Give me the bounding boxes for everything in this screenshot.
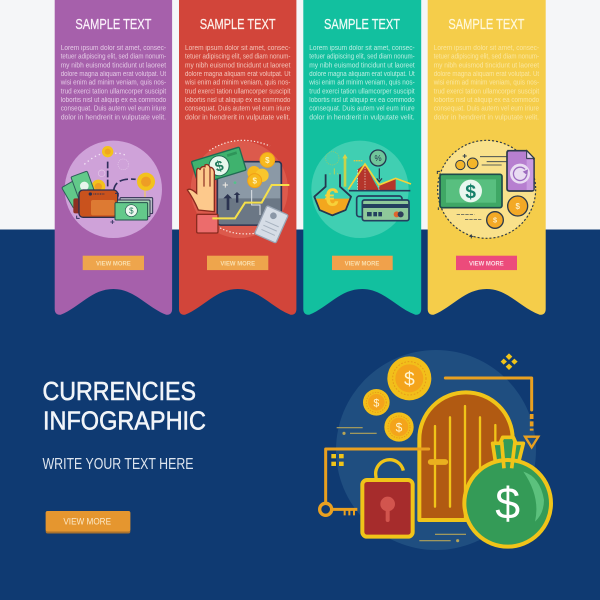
icon: euro pot, chart and cards [311, 141, 411, 238]
heading: SAMPLE TEXT [324, 16, 400, 33]
banner shape [303, 0, 421, 315]
sparkle diamonds [501, 353, 518, 370]
body text: dolore magna aliquam erat volutpat. Ut [61, 71, 166, 78]
banner shape [428, 0, 546, 315]
button: view more: VIEW MORE [469, 260, 504, 267]
body text: my nibh euismod tincidunt ut laoreet [61, 62, 166, 69]
panel: yellow banner [428, 0, 546, 315]
body text: tetuer adipiscing elit, sed diam nonum- [434, 54, 540, 61]
button: view more [332, 256, 393, 270]
body text: dolore magna aliquam erat volutpat. Ut [309, 71, 415, 78]
body text: lobortis nisl ut aliquip ex ea commodo [309, 97, 415, 104]
title: CURRENCIES [42, 378, 196, 406]
body text: lobortis nisl ut aliquip ex ea commodo [185, 97, 290, 104]
button: view more [456, 256, 517, 270]
icon: euro pot, chart and cards: % [374, 154, 382, 163]
body text: wisi enim ad minim veniam, quis nos- [184, 80, 291, 87]
body text [433, 45, 540, 121]
body text: Lorem ipsum dolor sit amet, consec- [309, 45, 415, 52]
heading: SAMPLE TEXT [448, 16, 524, 33]
button: view more: VIEW MORE [345, 260, 380, 267]
body text: dolor in hendrerit in vulputate velit. [185, 114, 290, 121]
backdrop circle [336, 350, 536, 550]
body text: trud exerci tation ullamcorper suscipit [61, 88, 166, 95]
body text: dolor in hendrerit in vulputate velit. [434, 114, 539, 121]
icon: hand, bill, screen and trend line: $ [213, 158, 226, 176]
background: navy lower band [0, 230, 600, 600]
panel: green banner [303, 0, 421, 315]
body text: wisi enim ad minim veniam, quis nos- [308, 80, 415, 87]
icon: wallet and cash: $ [129, 207, 134, 216]
banner shape [55, 0, 172, 315]
body text: Lorem ipsum dolor sit amet, consec- [61, 45, 167, 52]
icon: hand, bill, screen and trend line [187, 140, 289, 243]
body text: wisi enim ad minim veniam, quis nos- [433, 80, 540, 87]
body text [60, 45, 167, 121]
coins: $ [373, 397, 379, 409]
body text: Lorem ipsum dolor sit amet, consec- [434, 45, 540, 52]
body text: lobortis nisl ut aliquip ex ea commodo [61, 97, 166, 104]
coins: $ [404, 369, 415, 390]
subtitle: WRITE YOUR TEXT HERE [42, 456, 194, 473]
icon: banknote, document and coins [437, 140, 536, 238]
accent lines [337, 428, 466, 542]
button: view more [83, 256, 144, 270]
illustration: vault door, lock, key, coins and money bag [320, 350, 551, 550]
body text: Lorem ipsum dolor sit amet, consec- [185, 45, 291, 52]
icon: banknote, document and coins: $ [493, 216, 497, 225]
body text: consequat. Duis autem vel eum iriure [309, 106, 415, 113]
money bag [464, 437, 551, 547]
heading: SAMPLE TEXT [75, 16, 151, 33]
coins: $ [396, 420, 403, 434]
body text: my nibh euismod tincidunt ut laoreet [309, 62, 415, 69]
body text: tetuer adipiscing elit, sed diam nonum- [309, 54, 415, 61]
body text: dolor in hendrerit in vulputate velit. [309, 114, 415, 121]
body text: lobortis nisl ut aliquip ex ea commodo [434, 97, 539, 104]
icon: wallet and cash [62, 141, 162, 238]
body text: trud exerci tation ullamcorper suscipit [185, 88, 290, 95]
body text: trud exerci tation ullamcorper suscipit [434, 88, 539, 95]
body text: dolore magna aliquam erat volutpat. Ut [434, 71, 539, 78]
icon: banknote, document and coins: $ [515, 202, 520, 211]
body text: dolor in hendrerit in vulputate velit. [61, 114, 166, 121]
title: INFOGRAPHIC [43, 408, 206, 436]
body text: tetuer adipiscing elit, sed diam nonum- [61, 54, 167, 61]
body text: consequat. Duis autem vel eum iriure [185, 106, 290, 113]
door [419, 392, 513, 520]
body text: my nibh euismod tincidunt ut laoreet [185, 62, 290, 69]
icon: hand, bill, screen and trend line: $ [265, 156, 270, 165]
icon: hand, bill, screen and trend line: $ [252, 177, 257, 186]
body text: consequat. Duis autem vel eum iriure [434, 106, 539, 113]
body text [184, 45, 291, 121]
icon: banknote, document and coins: $ [465, 182, 476, 203]
body text: consequat. Duis autem vel eum iriure [61, 106, 166, 113]
body text: trud exerci tation ullamcorper suscipit [309, 88, 415, 95]
padlock [362, 460, 413, 537]
body text: my nibh euismod tincidunt ut laoreet [434, 62, 539, 69]
panel: purple banner [55, 0, 172, 315]
dashed arrow [445, 378, 538, 447]
button: view more [46, 511, 130, 534]
body text [308, 45, 415, 121]
background: light upper band [0, 0, 600, 230]
button: view more [207, 256, 268, 270]
button: view more: VIEW MORE [96, 260, 131, 267]
banner shape [179, 0, 296, 315]
heading: SAMPLE TEXT [200, 16, 276, 33]
button: view more: VIEW MORE [63, 516, 111, 526]
grid squares [331, 454, 344, 466]
icon: euro pot, chart and cards: € [325, 184, 339, 212]
panel: red banner [179, 0, 296, 315]
body text: tetuer adipiscing elit, sed diam nonum- [185, 54, 291, 61]
coins [363, 356, 431, 442]
body text: wisi enim ad minim veniam, quis nos- [60, 80, 167, 87]
body text: dolore magna aliquam erat volutpat. Ut [185, 71, 290, 78]
key with connecting line [320, 449, 429, 515]
button: view more: VIEW MORE [220, 260, 256, 267]
title [42, 378, 206, 436]
money bag: $ [495, 480, 520, 529]
